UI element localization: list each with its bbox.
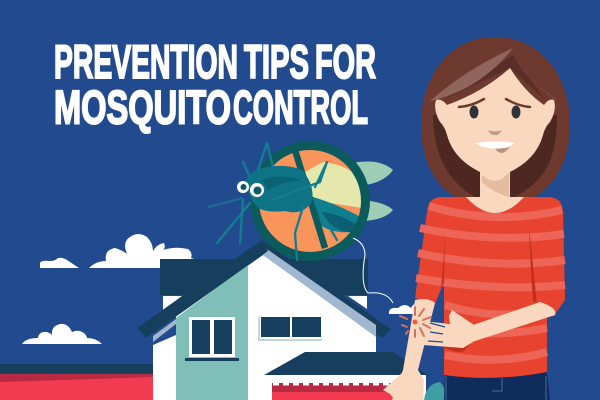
garage bbox=[270, 375, 426, 400]
roof shade right bbox=[263, 247, 376, 337]
plant bbox=[424, 382, 445, 400]
title: MOSQUITO bbox=[54, 82, 231, 134]
nose bbox=[488, 130, 502, 135]
neckline bbox=[466, 197, 524, 213]
lower wing bbox=[362, 200, 393, 221]
hair top shade bbox=[443, 55, 545, 100]
right window bbox=[258, 316, 322, 341]
title: FOR bbox=[315, 36, 376, 89]
abdomen bbox=[310, 196, 362, 232]
eyes bbox=[237, 181, 264, 197]
wing inside sign bbox=[303, 162, 364, 208]
cloud: low bbox=[22, 324, 102, 344]
legs bbox=[217, 143, 337, 260]
upper wing bbox=[352, 162, 393, 186]
neck shadow bbox=[482, 172, 509, 197]
bite cloud bbox=[389, 304, 418, 314]
title: PREVENTION bbox=[54, 36, 238, 89]
lip bbox=[495, 147, 510, 153]
hair shadow bbox=[433, 115, 557, 197]
finger gaps bbox=[428, 323, 445, 342]
title: TIPS bbox=[244, 36, 309, 89]
title: CONTROL bbox=[233, 82, 368, 134]
bite marks bbox=[400, 307, 431, 337]
face bbox=[435, 68, 555, 178]
mosquito and prohibition sign bbox=[208, 143, 393, 260]
roof shade left bbox=[153, 319, 176, 342]
body shade bbox=[262, 176, 304, 190]
walls bbox=[153, 255, 376, 400]
sleeve creases bbox=[441, 226, 537, 305]
cloud: large bbox=[89, 234, 198, 268]
body bbox=[246, 166, 313, 212]
hair fringe highlights bbox=[430, 48, 560, 101]
forearm across body bbox=[472, 302, 555, 342]
left window bbox=[185, 317, 239, 361]
right roof bbox=[262, 240, 391, 338]
lower hand bbox=[383, 370, 424, 400]
left roof bbox=[137, 240, 268, 338]
jeans stitching bbox=[446, 376, 546, 400]
back roof bbox=[160, 259, 368, 295]
shirt stripes bbox=[416, 206, 565, 360]
title bbox=[54, 36, 376, 134]
eyes bbox=[470, 106, 478, 118]
sign fill bbox=[254, 145, 366, 257]
hand shadow bbox=[440, 342, 472, 352]
teal wall bbox=[176, 264, 248, 400]
mouth bbox=[475, 142, 515, 149]
faint leg bbox=[208, 198, 243, 207]
hair back bbox=[421, 37, 570, 197]
abdomen shade bbox=[322, 212, 357, 232]
slash bbox=[295, 150, 325, 248]
neck bbox=[480, 165, 510, 200]
woman bbox=[383, 37, 570, 400]
ground bbox=[0, 364, 160, 400]
house bbox=[137, 240, 428, 400]
garage roof bbox=[264, 352, 428, 375]
hand bbox=[423, 310, 474, 348]
bitten arm bbox=[392, 299, 435, 400]
shirt bbox=[415, 197, 565, 378]
cloud: small bbox=[40, 258, 79, 268]
jeans bbox=[444, 372, 550, 400]
sign ring bbox=[254, 146, 366, 256]
gables bbox=[163, 296, 367, 310]
eyebrows bbox=[459, 99, 530, 107]
bite trail line bbox=[353, 238, 393, 303]
